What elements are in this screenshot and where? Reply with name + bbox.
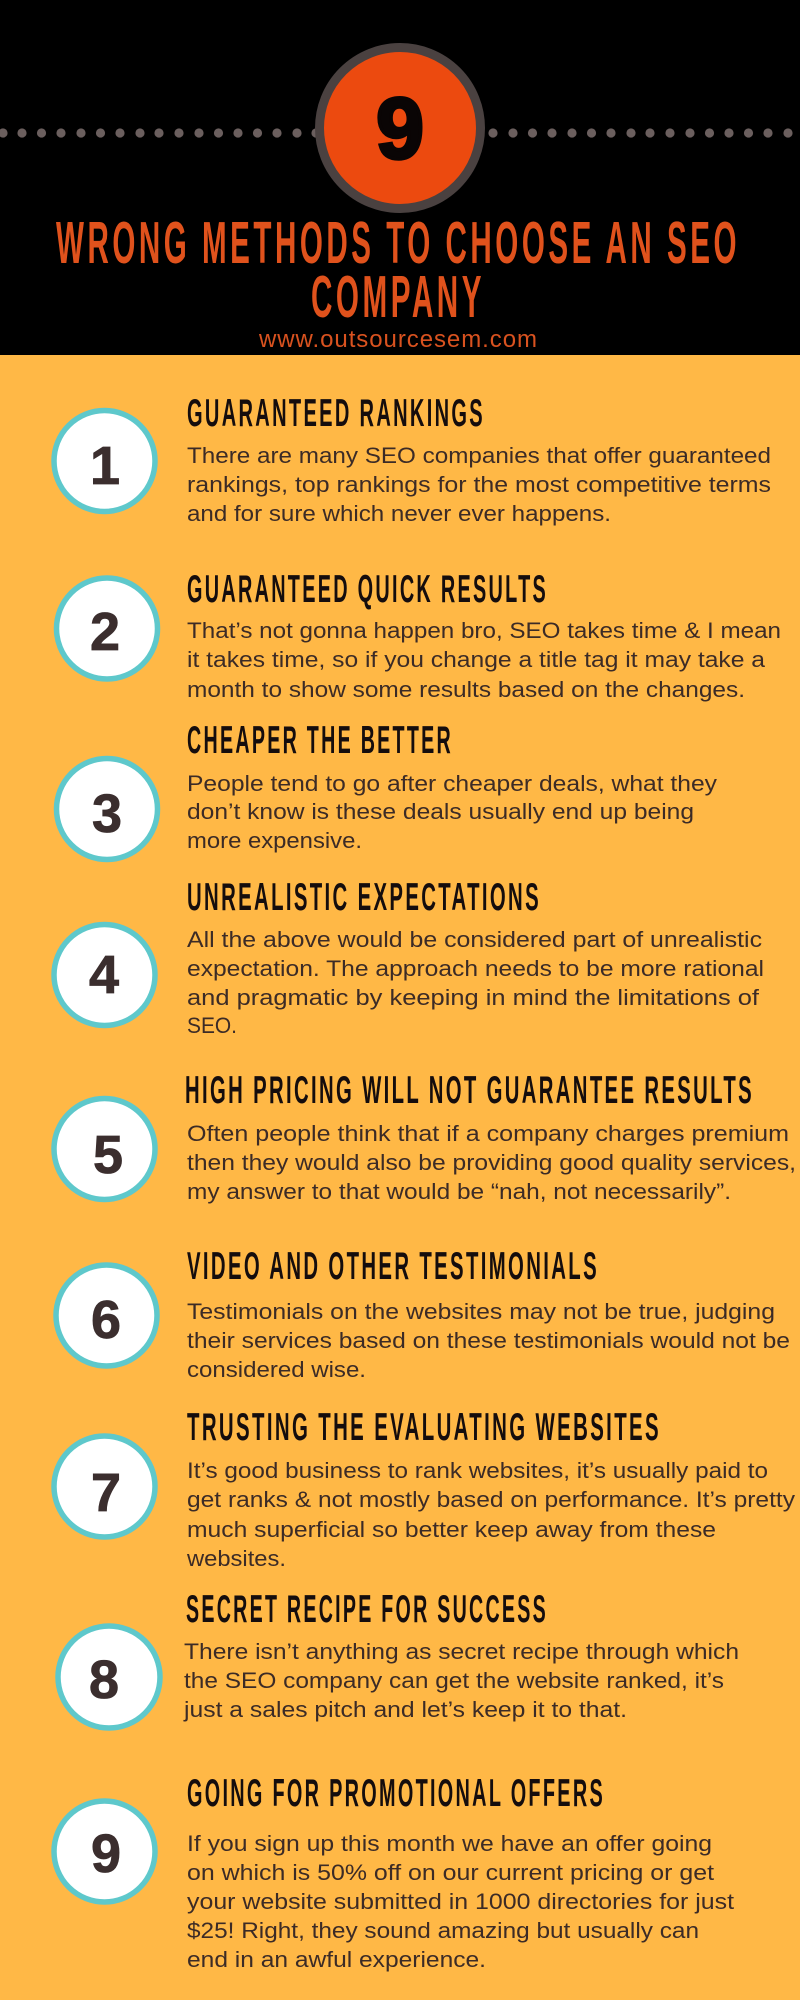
text block xyxy=(187,1121,796,1204)
icon: number 4: 4 xyxy=(89,945,119,1005)
text block xyxy=(187,1831,734,1972)
text block: If you sign up this month we have an offer going xyxy=(187,1831,712,1856)
text block: more expensive. xyxy=(187,828,362,853)
icon: number 9 xyxy=(54,1801,155,1902)
title xyxy=(56,210,740,330)
text block: their services based on these testimonials would not be xyxy=(187,1328,790,1353)
panel: item 2 xyxy=(56,568,781,702)
text block: All the above would be considered part of unrealistic xyxy=(187,927,762,952)
icon: number 2: 2 xyxy=(90,602,120,662)
text block: SEO. xyxy=(187,1013,237,1038)
icon: number 3: 3 xyxy=(92,784,122,844)
text block: on which is 50% off on our current pricing or get xyxy=(187,1860,714,1885)
text block: then they would also be providing good quality services, xyxy=(187,1150,796,1175)
text block xyxy=(187,443,771,526)
text block: get ranks & not mostly based on performance. It’s pretty xyxy=(187,1487,795,1512)
icon: number 4 xyxy=(54,924,155,1026)
text block xyxy=(187,1299,790,1382)
icon: number 2 xyxy=(56,578,158,679)
icon: number 9: 9 xyxy=(91,1824,121,1884)
website url: www.outsourcesem.com xyxy=(258,326,537,353)
text block xyxy=(187,927,764,1038)
panel: item 4 xyxy=(54,876,764,1038)
text block: and for sure which never ever happens. xyxy=(187,501,611,526)
panel: item 6 xyxy=(56,1245,790,1382)
title: COMPANY xyxy=(311,264,485,330)
icon: number 1: 1 xyxy=(90,436,120,496)
icon: number 3 xyxy=(56,758,158,860)
text block: end in an awful experience. xyxy=(187,1947,486,1972)
text block: expectation. The approach needs to be more rational xyxy=(187,956,764,981)
text block: People tend to go after cheaper deals, what they xyxy=(187,771,717,796)
heading: GUARANTEED RANKINGS xyxy=(187,392,485,435)
icon: number 5: 5 xyxy=(93,1125,123,1185)
text block: my answer to that would be “nah, not necessarily”. xyxy=(187,1179,731,1204)
text block: Testimonials on the websites may not be true, judging xyxy=(187,1299,775,1324)
text block: it takes time, so if you change a title tag it may take a xyxy=(187,647,766,672)
icon: number 8 xyxy=(58,1626,160,1728)
text block: It’s good business to rank websites, it’s usually paid to xyxy=(187,1458,768,1483)
panel: item 5 xyxy=(54,1069,796,1204)
text block xyxy=(187,771,717,853)
heading: CHEAPER THE BETTER xyxy=(187,719,453,762)
text block: That’s not gonna happen bro, SEO takes time & I mean xyxy=(187,618,781,643)
text block: the SEO company can get the website ranked, it’s xyxy=(184,1668,724,1693)
icon: number 5 xyxy=(54,1098,155,1200)
icon: number 7 xyxy=(54,1436,155,1537)
text block: websites. xyxy=(186,1546,286,1571)
icon: number 8: 8 xyxy=(89,1650,119,1710)
icon: big number nine badge xyxy=(320,48,480,208)
icon: big number nine badge: 9 xyxy=(376,81,424,177)
panel: item 7 xyxy=(54,1406,795,1571)
text block: considered wise. xyxy=(187,1357,366,1382)
text block: don’t know is these deals usually end up being xyxy=(187,799,694,824)
icon: number 6: 6 xyxy=(91,1290,121,1350)
text block: month to show some results based on the changes. xyxy=(187,677,745,702)
icon: number 1 xyxy=(54,410,155,512)
panel: item 3 xyxy=(56,719,717,860)
text block xyxy=(183,1639,739,1722)
panel: item 1 xyxy=(54,392,771,526)
icon: number 6 xyxy=(56,1265,157,1366)
text block xyxy=(187,618,781,702)
icon: number 7: 7 xyxy=(91,1463,121,1523)
text block: $25! Right, they sound amazing but usually can xyxy=(187,1918,699,1943)
text block: just a sales pitch and let’s keep it to that. xyxy=(183,1697,627,1722)
text block: and pragmatic by keeping in mind the limitations of xyxy=(187,985,760,1010)
text block xyxy=(186,1458,795,1571)
text block: There are many SEO companies that offer guaranteed xyxy=(187,443,771,468)
text block: There isn’t anything as secret recipe through which xyxy=(184,1639,739,1664)
panel: item 8 xyxy=(58,1588,739,1728)
text block: your website submitted in 1000 directories for just xyxy=(187,1889,734,1914)
text block: much superficial so better keep away from these xyxy=(187,1517,716,1542)
text block: rankings, top rankings for the most competitive terms xyxy=(187,472,771,497)
panel: header xyxy=(0,0,800,355)
panel: item 9 xyxy=(54,1772,734,1972)
text block: Often people think that if a company charges premium xyxy=(187,1121,789,1146)
